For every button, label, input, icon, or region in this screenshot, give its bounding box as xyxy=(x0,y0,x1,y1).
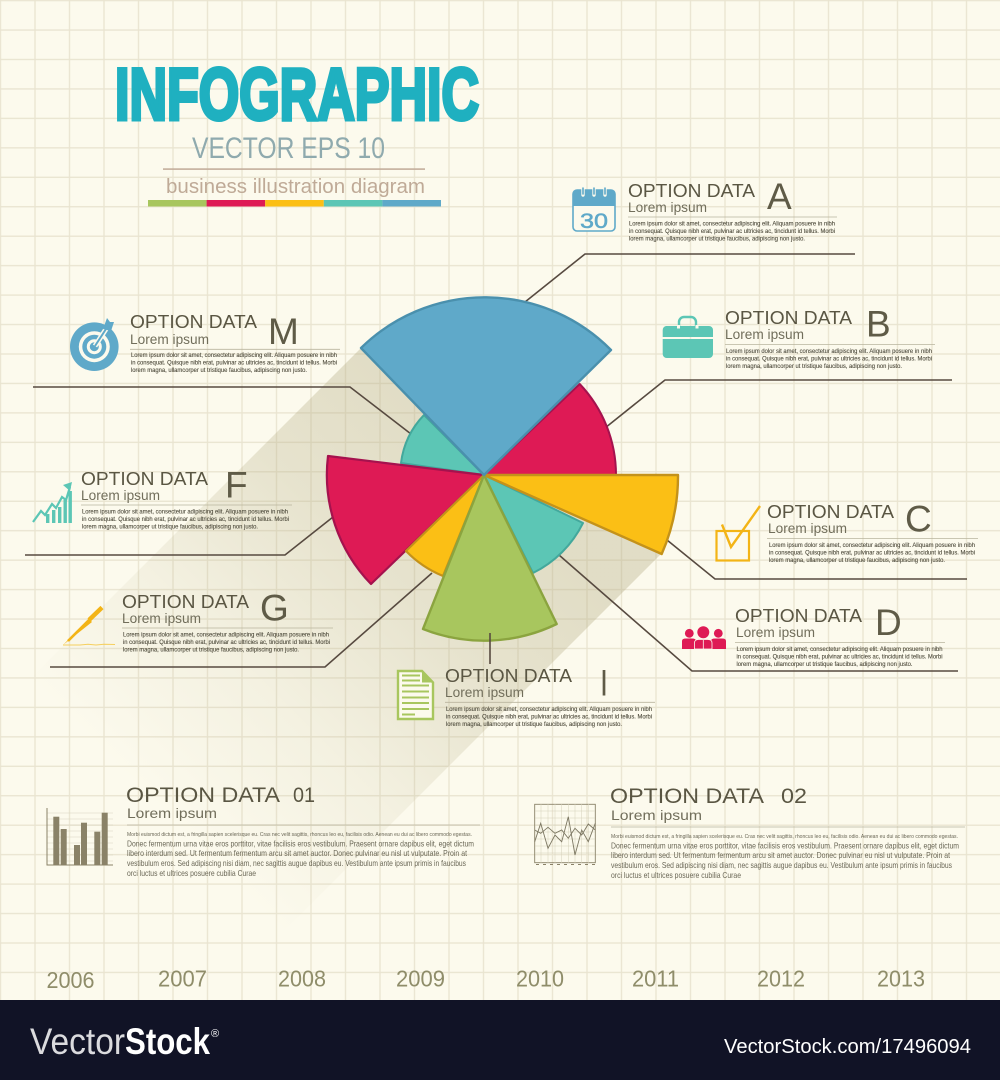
text block xyxy=(82,508,289,530)
slice: teal left xyxy=(401,415,484,475)
text block: lorem magna, ullamcorper ut tristique faucibus, adipiscing non justo. xyxy=(736,661,913,668)
timeline years: 2009 xyxy=(396,966,445,992)
text block: lorem magna, ullamcorper ut tristique faucibus, adipiscing non justo. xyxy=(726,363,902,370)
panel: option I xyxy=(398,662,655,728)
number: 01 xyxy=(293,784,315,807)
footer logo xyxy=(30,1021,219,1062)
text block: Lorem ipsum dolor sit amet, consectetur adipiscing elit. Aliquam posuere in nibh xyxy=(131,352,338,359)
panel: option F xyxy=(33,464,292,530)
footer logo: Vector xyxy=(30,1021,125,1062)
text block: libero interdum sed. Ut fermentum fermentum arcu sit amet auctor. Donec pulvinar eu nisl ut vulputate. Proin at xyxy=(127,849,468,858)
text block: Lorem ipsum dolor sit amet, consectetur adipiscing elit. Aliquam posuere in nibh xyxy=(82,508,289,516)
text block: Lorem ipsum dolor sit amet, consectetur adipiscing elit. Aliquam posuere in nibh xyxy=(123,632,330,638)
leader lines xyxy=(25,254,967,671)
heading: OPTION DATA xyxy=(126,784,280,807)
icon: growth chart xyxy=(33,482,72,523)
text block: Morbi euismod dictum est, a fringilla sapien scelerisque eu. Cras nec velit sagittis, rhoncus leo eu, facilisis odio. Aenean eu dui ac libero commodo egestas. xyxy=(127,832,472,838)
icon: document xyxy=(398,671,433,719)
text block: lorem magna, ullamcorper ut tristique faucibus, adipiscing non justo. xyxy=(82,524,258,530)
letter: B xyxy=(866,304,891,344)
panel: option M xyxy=(70,311,340,374)
text block: in consequat. Quisque nibh erat, pulvinar ac ultricies ac, tincidunt id tellus. Morbi xyxy=(726,356,932,362)
leader stub on green slice xyxy=(489,633,491,664)
timeline years xyxy=(46,966,925,993)
heading: OPTION DATA xyxy=(445,665,573,686)
text block xyxy=(127,832,474,878)
text block: Lorem ipsum dolor sit amet, consectetur adipiscing elit. Aliquam posuere in nibh xyxy=(736,646,943,653)
footer url: VectorStock.com/17496094 xyxy=(724,1036,971,1058)
text block: orci luctus et ultrices posuere cubilia Curae xyxy=(127,869,256,878)
icon: bar chart xyxy=(47,808,113,865)
timeline years: 2008 xyxy=(278,966,326,992)
text block: lorem magna, ullamcorper ut tristique faucibus, adipiscing non justo. xyxy=(123,646,299,654)
heading: OPTION DATA xyxy=(735,605,863,626)
icon: target with dart xyxy=(70,318,119,371)
heading: OPTION DATA xyxy=(767,501,895,522)
letter: D xyxy=(875,602,902,643)
text block: Morbi euismod dictum est, a fringilla sapien scelerisque eu. Cras nec velit sagittis, rhoncus leo eu, facilisis odio. Aenean eu dui ac libero commodo egestas. xyxy=(611,834,958,840)
timeline years: 2010 xyxy=(516,966,564,992)
subheading: Lorem ipsum xyxy=(122,611,201,626)
pie chart xyxy=(327,297,678,641)
letter: C xyxy=(905,498,932,540)
subheading: Lorem ipsum xyxy=(81,488,160,503)
text block: in consequat. Quisque nibh erat, pulvinar ac ultricies ac, tincidunt id tellus. Morbi xyxy=(736,654,942,660)
slice: teal lower right xyxy=(484,475,583,573)
icon: checkbox xyxy=(716,506,760,560)
subheading: Lorem ipsum xyxy=(736,625,815,640)
panel: option B xyxy=(663,304,935,370)
text block: lorem magna, ullamcorper ut tristique faucibus, adipiscing non justo. xyxy=(629,236,805,242)
text block xyxy=(769,542,976,564)
icon: calendar xyxy=(573,188,615,233)
letter: M xyxy=(268,311,299,352)
subheading: Lorem ipsum xyxy=(725,327,804,342)
letter: G xyxy=(260,588,289,628)
timeline years: 2012 xyxy=(757,966,805,992)
slice: blue top xyxy=(361,297,611,475)
footer logo: Stock xyxy=(125,1021,210,1062)
text block xyxy=(629,220,836,242)
heading: OPTION DATA xyxy=(725,307,853,328)
text block xyxy=(726,348,933,370)
text block: Lorem ipsum dolor sit amet, consectetur adipiscing elit. Aliquam posuere in nibh xyxy=(446,706,653,713)
icon: people xyxy=(682,626,726,649)
subtitle: vector eps 10: VECTOR EPS 10 xyxy=(192,132,385,165)
text block: in consequat. Quisque nibh erat, pulvinar ac ultricies ac, tincidunt id tellus. Morbi xyxy=(769,550,975,556)
icon: pencil xyxy=(63,608,115,645)
slice: yellow lower left xyxy=(406,475,484,576)
letter: I xyxy=(600,662,608,704)
text block: Lorem ipsum dolor sit amet, consectetur adipiscing elit. Aliquam posuere in nibh xyxy=(726,348,933,355)
text block xyxy=(131,352,338,374)
subheading: Lorem ipsum xyxy=(768,521,847,536)
text block: Lorem ipsum dolor sit amet, consectetur adipiscing elit. Aliquam posuere in nibh xyxy=(629,220,836,228)
long diagonal shadow of the pie chart xyxy=(0,348,661,965)
colour bar legend xyxy=(148,200,441,206)
letter: F xyxy=(225,464,248,506)
text block: in consequat. Quisque nibh erat, pulvinar ac ultricies ac, tincidunt id tellus. Morbi xyxy=(629,228,835,235)
text block: orci luctus et ultrices posuere cubilia Curae xyxy=(611,871,741,880)
text block: lorem magna, ullamcorper ut tristique faucibus, adipiscing non justo. xyxy=(769,557,945,564)
timeline years: 2006 xyxy=(46,967,94,993)
panel: option A xyxy=(573,176,837,242)
icon: briefcase xyxy=(663,317,713,358)
text block: in consequat. Quisque nibh erat, pulvinar ac ultricies ac, tincidunt id tellus. Morbi xyxy=(131,360,337,366)
subtitle: business illustration diagram: business illustration diagram xyxy=(166,176,425,198)
slice: crimson right xyxy=(484,384,616,475)
timeline years: 2013 xyxy=(877,966,925,992)
timeline years: 2011 xyxy=(632,966,679,992)
footer logo: ® xyxy=(211,1028,219,1040)
text block: vestibulum eros. Sed adipiscing nisi diam, nec sagittis augue dapibus eu. Vestibulum ante ipsum primis in faucibus xyxy=(127,859,466,868)
heading: OPTION DATA xyxy=(610,785,764,808)
text block xyxy=(446,706,653,728)
panel: option G xyxy=(63,588,333,654)
text block: lorem magna, ullamcorper ut tristique faucibus, adipiscing non justo. xyxy=(131,367,307,374)
panel: option D xyxy=(682,602,945,668)
text block: lorem magna, ullamcorper ut tristique faucibus, adipiscing non justo. xyxy=(446,721,622,728)
slice: green bottom xyxy=(423,475,557,641)
slice: yellow right xyxy=(484,475,678,554)
heading: OPTION DATA xyxy=(122,591,250,612)
slice: crimson left xyxy=(327,456,484,584)
text block: in consequat. Quisque nibh erat, pulvinar ac ultricies ac, tincidunt id tellus. Morbi xyxy=(123,639,330,646)
timeline years: 2007 xyxy=(158,966,207,992)
text block xyxy=(123,632,330,654)
subheading: Lorem ipsum xyxy=(611,807,702,823)
subheading: Lorem ipsum xyxy=(628,200,707,215)
number: 02 xyxy=(781,785,807,808)
text block: in consequat. Quisque nibh erat, pulvinar ac ultricies ac, tincidunt id tellus. Morbi xyxy=(82,516,289,523)
title: INFOGRAPHIC xyxy=(115,54,479,136)
subheading: Lorem ipsum xyxy=(445,685,524,700)
panel: option data 02 xyxy=(535,785,965,880)
text block xyxy=(611,834,959,880)
icon: line chart xyxy=(535,804,595,864)
text block xyxy=(736,646,943,668)
text block: Lorem ipsum dolor sit amet, consectetur adipiscing elit. Aliquam posuere in nibh xyxy=(769,542,976,549)
panel: option C xyxy=(716,498,978,564)
subheading: Lorem ipsum xyxy=(130,332,209,347)
heading: OPTION DATA xyxy=(81,468,209,489)
icon: calendar: 30 xyxy=(580,210,608,233)
letter: A xyxy=(767,176,792,217)
subheading: Lorem ipsum xyxy=(127,805,217,821)
heading: OPTION DATA xyxy=(130,311,258,332)
panel: option data 01 xyxy=(47,784,480,878)
text block: Donec fermentum urna vitae eros porttitor, vitae facilisis eros vestibulum. Praesent ornare dapibus elit, eget dictum xyxy=(127,840,474,848)
text block: in consequat. Quisque nibh erat, pulvinar ac ultricies ac, tincidunt id tellus. Morbi xyxy=(446,714,652,720)
footer band xyxy=(0,1000,1000,1080)
heading: OPTION DATA xyxy=(628,180,756,201)
